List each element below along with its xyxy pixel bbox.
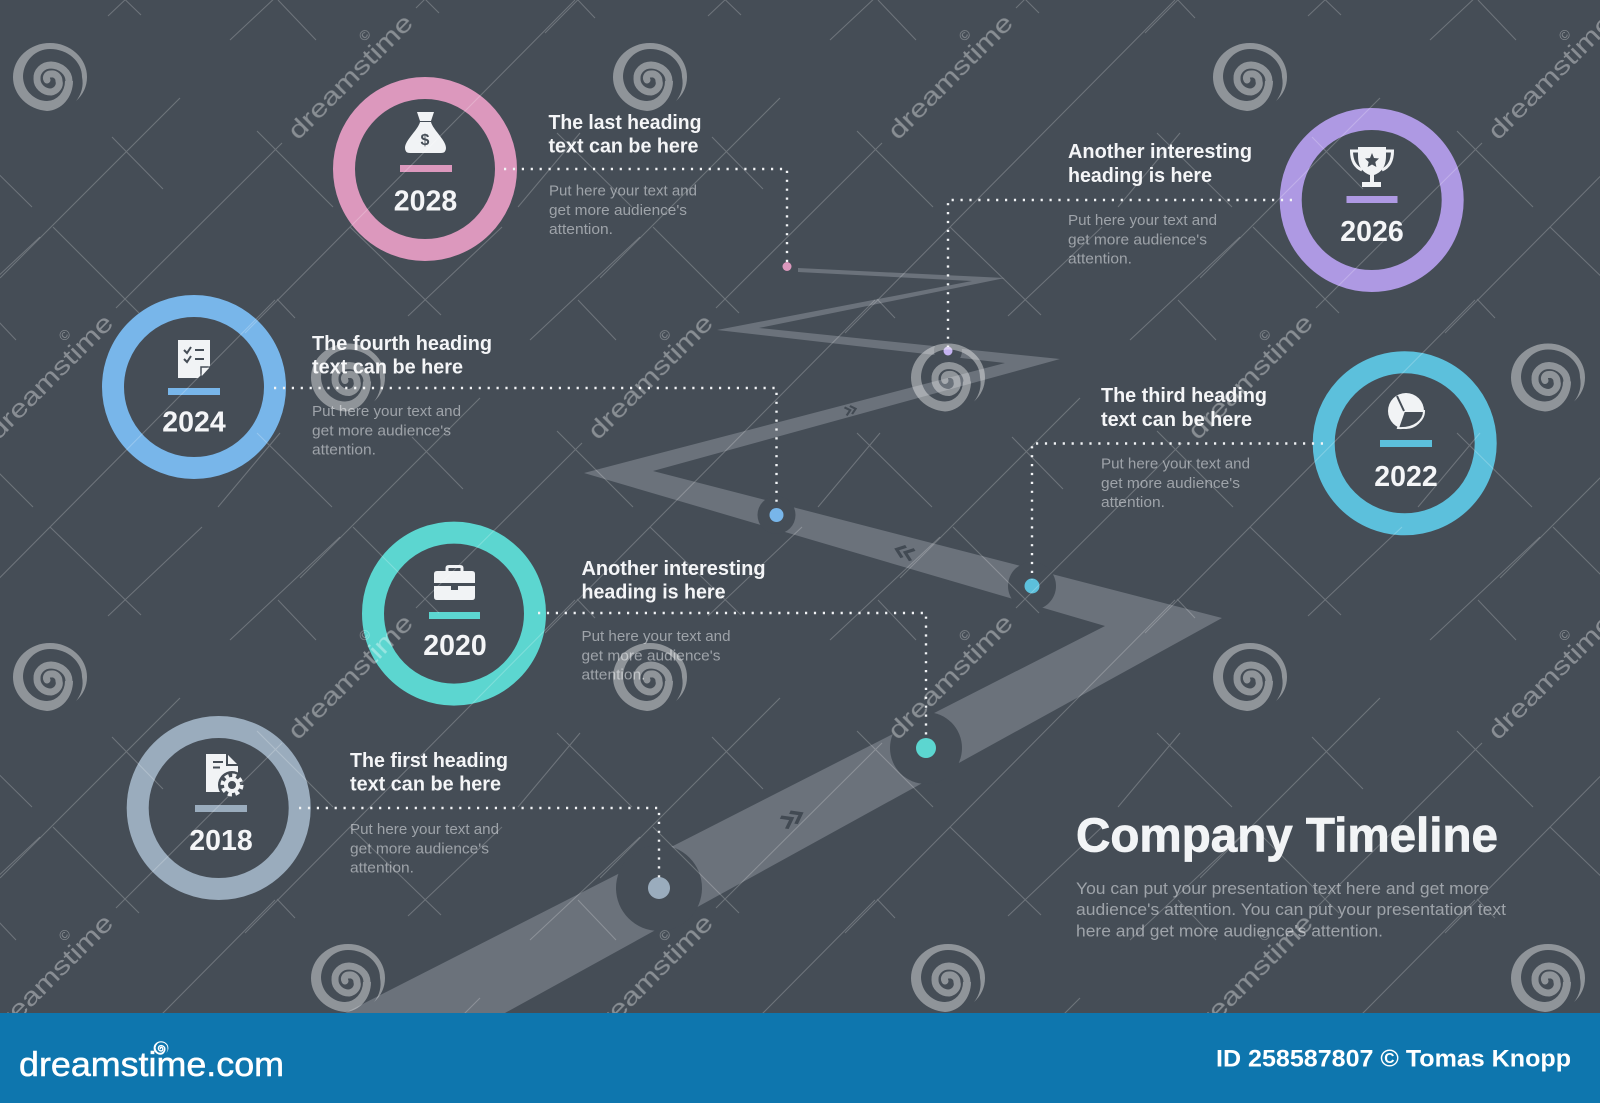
milestone 2028: Put here your text and — [549, 182, 697, 200]
description text: audience's attention. You can put your presentation text — [1076, 901, 1506, 919]
milestone 2024 — [113, 306, 492, 468]
watermark text: © — [1255, 325, 1274, 344]
watermark text: dreamstime — [1482, 9, 1600, 145]
milestone 2018: Put here your text and — [350, 821, 499, 838]
footer logo: dreamstime.com — [19, 1046, 284, 1084]
footer credit: ID 258587807 © Tomas Knopp — [1216, 1046, 1571, 1072]
watermark text: © — [955, 625, 974, 644]
milestone 2028: 2028 — [394, 186, 457, 218]
watermark text: dreamstime — [882, 9, 1019, 145]
road direction arrows — [781, 405, 915, 829]
milestone 2026: Put here your text and — [1068, 212, 1217, 229]
milestone 2022: text can be here — [1101, 409, 1252, 431]
watermark text: © — [1555, 25, 1574, 44]
milestone 2020: Another interesting — [582, 558, 766, 580]
watermark text: dreamstime — [582, 309, 719, 445]
watermark text: © — [1555, 625, 1574, 644]
milestone 2026: heading is here — [1068, 165, 1212, 187]
milestone 2018: 2018 — [189, 825, 253, 857]
milestone 2020 — [373, 533, 766, 695]
milestone 2028: attention. — [549, 221, 613, 238]
milestone 2028: The last heading — [548, 112, 702, 134]
milestone 2022: The third heading — [1101, 385, 1267, 407]
milestone 2018 — [138, 727, 508, 889]
milestone 2018: text can be here — [350, 774, 501, 796]
watermark text: dreamstime — [582, 909, 719, 1045]
description text — [1076, 880, 1506, 940]
milestone 2020: 2020 — [423, 630, 487, 662]
road: zigzag timeline path — [345, 268, 1222, 1013]
icon: checklist document — [178, 340, 211, 378]
watermark text: © — [655, 325, 674, 344]
title: Company Timeline — [1076, 810, 1498, 862]
milestone 2020: get more audience's — [582, 648, 720, 664]
milestone 2022: 2022 — [1374, 461, 1438, 493]
dotted leader lines — [274, 169, 1323, 878]
description text: here and get more audience's attention. — [1076, 922, 1383, 940]
milestone 2028: get more audience's — [549, 202, 687, 219]
milestone 2022: get more audience's — [1101, 475, 1240, 492]
milestone 2026: attention. — [1068, 250, 1132, 268]
milestone 2024: text can be here — [312, 356, 463, 378]
milestone 2020: Put here your text and — [582, 628, 730, 645]
watermark text: © — [955, 25, 974, 44]
milestone 2026: Another interesting — [1068, 141, 1252, 163]
milestone 2024: 2024 — [162, 406, 226, 438]
milestone 2028 — [344, 88, 702, 250]
watermark text: © — [655, 925, 674, 944]
icon: money bag — [405, 112, 446, 153]
description text: You can put your presentation text here and get more — [1076, 880, 1489, 898]
watermark text: dreamstime — [282, 609, 419, 745]
icon: trophy — [1352, 147, 1392, 187]
milestone 2026 — [1068, 119, 1453, 281]
road node dots — [648, 262, 1040, 899]
watermark text: dreamstime — [882, 609, 1019, 745]
milestone 2028: text can be here — [548, 136, 698, 158]
watermark text: © — [55, 925, 74, 944]
watermark text: dreamstime — [282, 9, 419, 145]
road node discs — [616, 337, 1056, 931]
milestone 2018: The first heading — [350, 750, 508, 772]
milestone 2024: attention. — [312, 442, 376, 458]
watermark text: © — [355, 625, 374, 644]
milestone 2026: get more audience's — [1068, 232, 1207, 248]
milestone 2024: The fourth heading — [312, 333, 492, 355]
watermark text: dreamstime — [1482, 609, 1600, 745]
milestone 2018: get more audience's — [350, 840, 489, 858]
milestone 2018: attention. — [350, 860, 414, 876]
icon: briefcase — [434, 566, 475, 600]
watermark text: © — [355, 25, 374, 44]
watermark text: © — [55, 325, 74, 344]
watermark text: © — [1255, 925, 1274, 944]
footer bar — [0, 1013, 1600, 1103]
milestone 2020: heading is here — [582, 582, 726, 604]
milestone 2022: attention. — [1101, 494, 1165, 511]
icon: document with gear — [206, 754, 246, 799]
icon: pie chart — [1388, 393, 1424, 429]
milestone 2026: 2026 — [1340, 216, 1404, 248]
milestone 2022: Put here your text and — [1101, 456, 1250, 472]
watermark text: dreamstime — [1182, 909, 1319, 1045]
watermark text: dreamstime — [1182, 309, 1319, 445]
milestone 2020: attention. — [582, 666, 646, 684]
icon: money bag: $ — [421, 132, 430, 149]
milestone 2024: get more audience's — [312, 422, 451, 440]
milestone 2022 — [1101, 362, 1486, 524]
milestone 2024: Put here your text and — [312, 403, 461, 420]
